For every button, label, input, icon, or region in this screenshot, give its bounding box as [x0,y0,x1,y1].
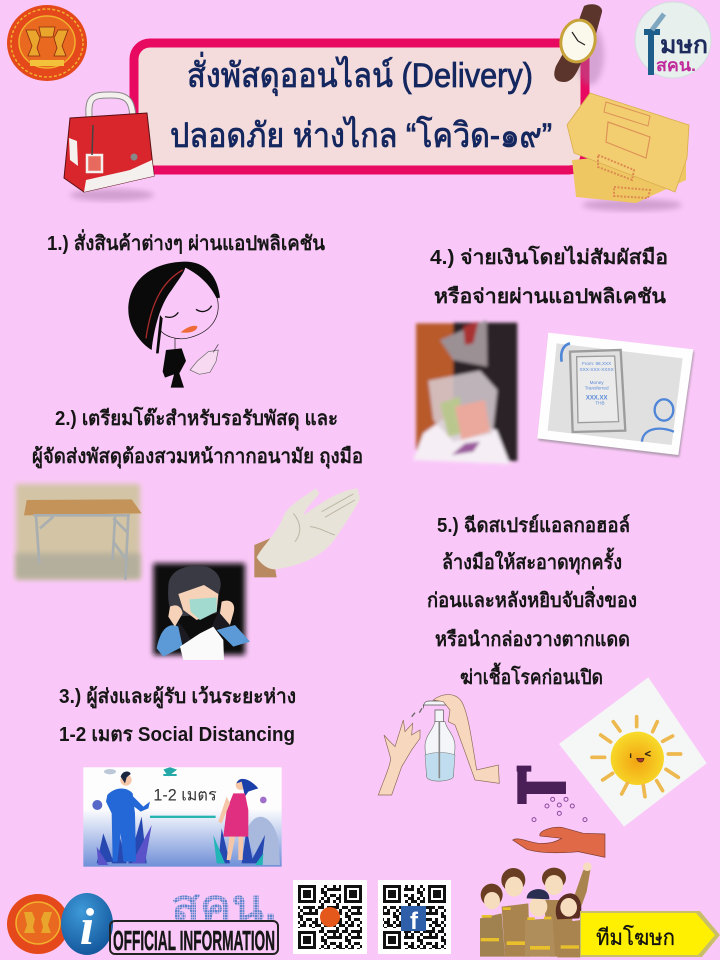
woman figure [218,779,258,860]
photo: latex gloves [254,488,360,577]
illustration: social distancing scene [83,767,282,867]
footer: yellow arrow label [580,911,720,957]
logo: spokesperson team badge [635,2,711,78]
QR code: facebook [378,880,451,954]
distance line [150,816,216,818]
receipt small text: Money [590,380,604,385]
photo: money in a bag [413,320,517,464]
footer: police team illustration [480,862,592,957]
icon: wrist watch [554,4,604,85]
step 3 text: 3.) ผู้ส่งและผู้รับ เว้นระยะห่าง [59,685,296,710]
receipt small text: THB [595,400,605,405]
illustration: transfer receipt card [537,333,694,457]
title line 2: ปลอดภัย ห่างไกล “โควิด-๑๙” [170,116,552,155]
step 5 text: หรือนำกล่องวางตากแดด [435,628,630,651]
step 4 text: หรือจ่ายผ่านแอปพลิเคชัน [434,285,666,308]
illustration: faucet with water drops and hand [513,766,605,857]
step 5 text: ล้างมือให้สะอาดทุกครั้ง [442,547,622,575]
step 2 text: 2.) เตรียมโต๊ะสำหรับรอรับพัสดุ และ [55,406,338,431]
step 3 text: 1-2 เมตร Social Distancing [59,724,295,746]
officer back right [542,868,577,957]
title panel [134,43,585,170]
info icon [61,893,113,955]
step 5 text: 5.) ฉีดสเปรย์แอลกอฮอล์ [437,514,630,537]
step 1 text: 1.) สั่งสินค้าต่างๆ ผ่านแอปพลิเคชัน [47,228,325,255]
step 4 text [430,245,668,308]
icon: red handbag [64,95,154,201]
man figure [106,772,150,862]
receipt small text [580,361,615,405]
raised arm [572,868,591,910]
QR code: facebook: f [410,908,419,935]
step 4 text: 4.) จ่ายเงินโดยไม่สัมผัสมือ [430,245,668,269]
footer: official information logo [110,882,278,956]
receipt small text: From: 98,XXX [582,361,612,366]
step 5 text: ฆ่าเชื้อโรคก่อนเปิด [460,662,603,689]
officer front centre [525,889,555,957]
step 3 text [59,685,296,746]
step 2 text: ผู้จัดส่งพัสดุต้องสวมหน้ากากอนามัย ถุงมือ [32,445,363,470]
officer back left [480,884,505,957]
footer: seal and info badge: i [80,899,95,956]
icon: parcel boxes [567,93,689,211]
distance label: 1-2 เมตร [153,786,217,805]
photo: folding table [16,484,142,580]
footer: yellow arrow label: ทีมโฆษก [596,925,675,950]
logo: spokesperson team badge: สคน. [656,56,696,75]
illustration: girl putting on face mask [153,563,250,660]
illustration: hand sanitizer pump [378,695,499,795]
footer: official information logo: สคน. [171,882,277,929]
icon: woman using phone [128,262,220,388]
officer front right [556,893,581,957]
officer back mid left [501,868,530,957]
seal [7,894,69,954]
logo: royal seal top left [7,5,87,81]
infographic canvas: OFFICIAL INFORMATION [113,925,275,956]
step 5 text: ก่อนและหลังหยิบจับสิ่งของ [427,585,637,612]
step 5 text [427,514,637,689]
footer: seal and info badge [7,893,113,956]
step 2 text [32,406,363,470]
QR code: website [293,880,367,954]
receipt small text: XXX-XXX-XXXX [580,367,615,372]
receipt small text: Transferred [585,385,609,390]
illustration: sun on white card [559,677,707,827]
receipt small text: XXX.XX [586,395,607,401]
title line 1: สั่งพัสดุออนไลน์ (Delivery) [187,52,533,96]
logo: spokesperson team badge: มษก [660,32,708,59]
